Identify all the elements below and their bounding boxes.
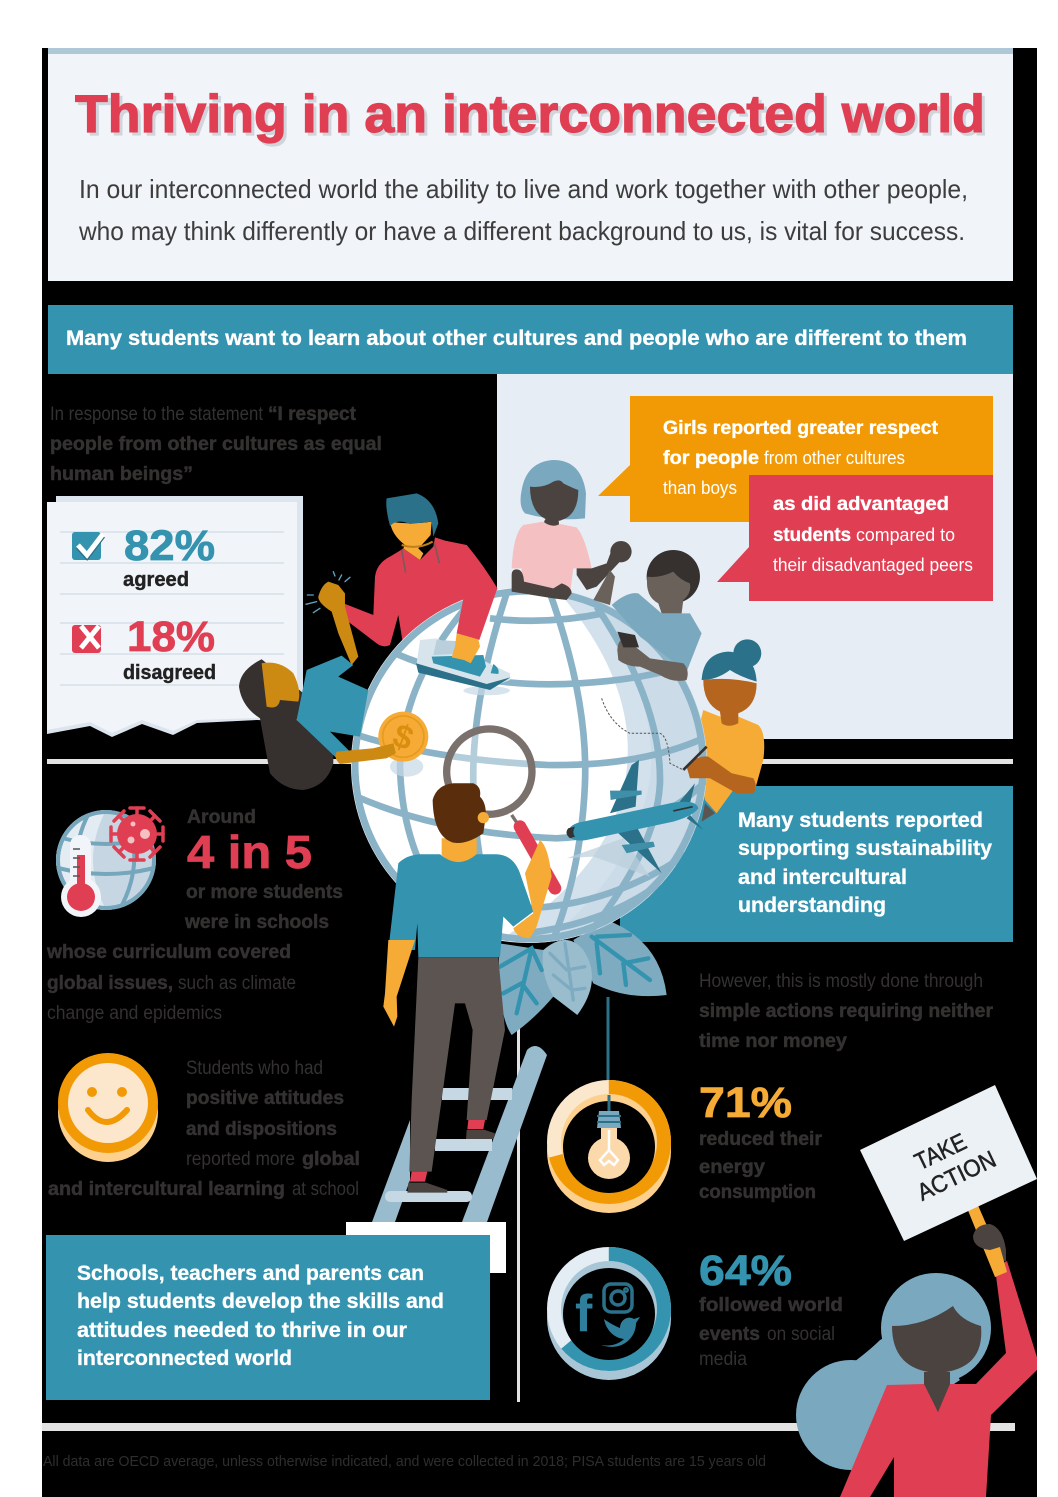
speech bubble: advantaged students bbox=[717, 475, 993, 601]
panel: schools teachers parents: attitudes needed to thrive in our bbox=[77, 1318, 408, 1342]
banner: many students want to learn bbox=[48, 305, 1013, 374]
panel: sustainability callout: and intercultural bbox=[738, 865, 907, 889]
text: positive attitudes: Students who had bbox=[186, 1058, 323, 1079]
text: 4 in 5: were in schools bbox=[184, 912, 329, 933]
intro text bbox=[78, 174, 968, 246]
panel: sustainability callout bbox=[620, 786, 1013, 942]
stat: 82% agreed: agreed bbox=[123, 569, 189, 591]
text: simple actions: time nor money bbox=[699, 1031, 847, 1052]
illustration: coin and lying person: $ bbox=[388, 717, 418, 758]
footnote: All data are OECD average, unless otherwise indicated, and were collected in 2018; PISA students are 15 years old bbox=[43, 1453, 766, 1470]
speech bubble: advantaged students: students bbox=[773, 525, 851, 546]
panel: schools teachers parents bbox=[46, 1235, 490, 1400]
stat: 71%: consumption bbox=[699, 1182, 816, 1203]
sign: TAKE bbox=[911, 1128, 971, 1176]
stat: 82% agreed: 82% bbox=[124, 522, 215, 570]
speech bubble: girls: Girls reported greater respect bbox=[663, 418, 939, 439]
text: simple actions: However, this is mostly done through bbox=[699, 971, 983, 992]
stat: 82% agreed bbox=[123, 522, 215, 591]
statement text bbox=[50, 404, 382, 485]
statement text: people from other cultures as equal bbox=[50, 434, 382, 455]
icon: climate globe and virus bbox=[56, 808, 163, 917]
title: Thriving in an interconnected world bbox=[75, 85, 985, 144]
illustration: hoodie arm and laptop bbox=[416, 545, 511, 690]
text: positive attitudes: reported more bbox=[186, 1149, 295, 1170]
text: simple actions: simple actions requiring neither bbox=[699, 1001, 994, 1022]
text: 4 in 5: 4 in 5 bbox=[187, 826, 312, 878]
stat: 64%: events bbox=[699, 1324, 760, 1345]
text: positive attitudes bbox=[48, 1058, 360, 1200]
chart: 71% donut with bulb bbox=[547, 1087, 671, 1213]
panel: schools teachers parents: help students develop the skills and bbox=[77, 1289, 444, 1313]
stat: 71% bbox=[699, 1079, 823, 1203]
illustration: magnifier person bbox=[388, 729, 555, 957]
intro text: who may think differently or have a different background to us, is vital for success. bbox=[78, 216, 965, 246]
statement text: In response to the statement bbox=[50, 404, 264, 425]
illustration: person with bun, shirt bbox=[693, 710, 764, 822]
sign: ACTION bbox=[913, 1146, 1000, 1207]
text: 4 in 5: Around bbox=[187, 807, 256, 828]
illustration: red hoodie person torso bbox=[335, 493, 497, 657]
intro text: In our interconnected world the ability to live and work together with other people, bbox=[79, 174, 968, 204]
speech bubble: advantaged students: compared to bbox=[856, 524, 955, 545]
text: positive attitudes: and dispositions bbox=[186, 1119, 337, 1140]
text: positive attitudes: at school bbox=[292, 1179, 359, 1200]
panel: white base block bbox=[346, 1222, 506, 1273]
text: 4 in 5: or more students bbox=[186, 882, 343, 903]
stat: 18% disagreed: 18% bbox=[127, 613, 215, 661]
text: 4 in 5: global issues, bbox=[47, 973, 173, 994]
icon: facebook: f bbox=[575, 1285, 593, 1343]
text: simple actions bbox=[699, 971, 994, 1052]
stat: 18% disagreed: disagreed bbox=[123, 662, 216, 684]
statement text: human beings” bbox=[50, 464, 193, 485]
illustration: blue shirt person bbox=[612, 550, 702, 681]
sign bbox=[860, 1085, 1037, 1241]
illustration: leaves under globe bbox=[499, 920, 667, 1035]
banner: many students want to learn: Many students want to learn about other cultures and people who are different to them bbox=[66, 326, 967, 350]
panel: header bbox=[48, 48, 1013, 281]
icon: check box bbox=[72, 532, 103, 560]
stat: 64%: 64% bbox=[699, 1247, 792, 1295]
stat: 64%: media bbox=[699, 1349, 747, 1370]
text: 4 in 5: such as climate bbox=[178, 973, 296, 994]
panel: sustainability callout: Many students reported bbox=[738, 808, 983, 832]
illustration: globe bbox=[351, 588, 707, 943]
text: positive attitudes: global bbox=[302, 1149, 360, 1170]
panel: sustainability callout: supporting sustainability bbox=[738, 836, 992, 860]
hanging cord bbox=[606, 997, 610, 1081]
icon: cross box bbox=[72, 625, 101, 653]
stat: 71%: 71% bbox=[699, 1079, 792, 1127]
icon: smiley bbox=[58, 1053, 158, 1162]
icon: airplane bbox=[566, 760, 703, 873]
text: positive attitudes: and intercultural learning bbox=[48, 1179, 285, 1200]
speech bubble: girls: for people bbox=[663, 448, 759, 469]
icon: light bulb bbox=[588, 1095, 630, 1179]
speech bubble: advantaged students: as did advantaged bbox=[773, 494, 949, 515]
speech bubble: advantaged students: their disadvantaged peers bbox=[773, 554, 973, 575]
panel: schools teachers parents: Schools, teachers and parents can bbox=[77, 1261, 424, 1285]
speech bubble: girls: than boys bbox=[663, 477, 737, 498]
stat: 64%: followed world bbox=[699, 1295, 843, 1316]
icon: twitter bbox=[601, 1317, 640, 1347]
speech bubble: girls: from other cultures bbox=[764, 447, 905, 468]
panel: sustainability callout: understanding bbox=[738, 893, 886, 917]
illustration: magnifier person legs bbox=[383, 940, 505, 1193]
statement text: “I respect bbox=[268, 404, 357, 425]
stat: 71%: reduced their bbox=[699, 1129, 823, 1150]
illustration: woman with take action sign bbox=[796, 1085, 1040, 1497]
panel: light background right bbox=[497, 374, 1013, 739]
illustration: person with bun bbox=[602, 639, 761, 793]
stat: 71%: energy bbox=[699, 1157, 765, 1178]
speech bubble: girls bbox=[598, 396, 993, 522]
text: 4 in 5 bbox=[46, 807, 343, 1024]
text: 4 in 5: whose curriculum covered bbox=[46, 942, 291, 963]
text: positive attitudes: positive attitudes bbox=[186, 1088, 344, 1109]
illustration: pink shirt person arms bbox=[512, 541, 632, 605]
stat: 64% bbox=[699, 1247, 843, 1370]
illustration: pink shirt person bbox=[512, 460, 592, 593]
text: 4 in 5: change and epidemics bbox=[47, 1003, 222, 1024]
stat: 18% disagreed bbox=[123, 613, 216, 684]
icon: instagram bbox=[604, 1284, 632, 1312]
illustration: ladder bbox=[372, 1046, 547, 1222]
chart: 64% donut with social icons bbox=[547, 1254, 671, 1380]
illustration: coin and lying person bbox=[239, 572, 428, 790]
panel: survey paper bbox=[47, 496, 303, 737]
stat: 64%: on social bbox=[767, 1324, 835, 1345]
panel: schools teachers parents: interconnected world bbox=[77, 1346, 292, 1370]
